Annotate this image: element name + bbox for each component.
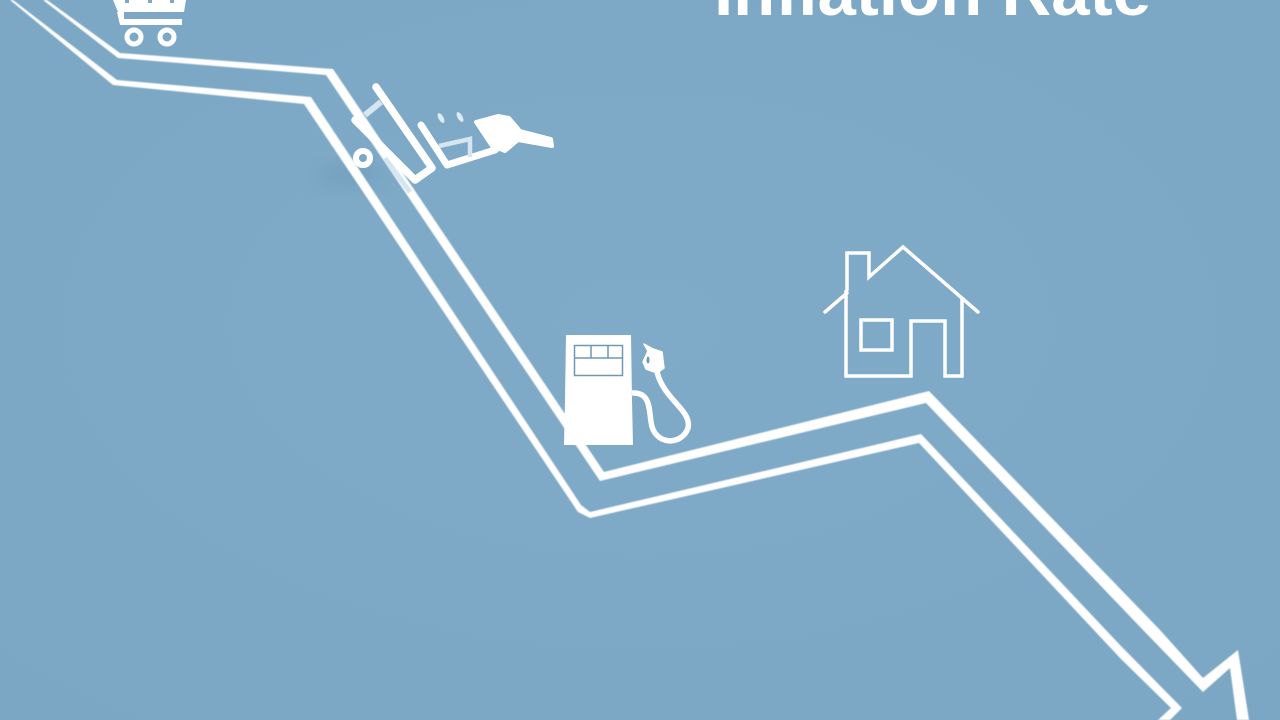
icon: tipped cart and fuel nozzle bbox=[355, 87, 552, 192]
icon: fuel pump bbox=[564, 335, 688, 445]
icon: house bbox=[825, 247, 978, 376]
icon: shopping cart bbox=[113, 0, 186, 44]
